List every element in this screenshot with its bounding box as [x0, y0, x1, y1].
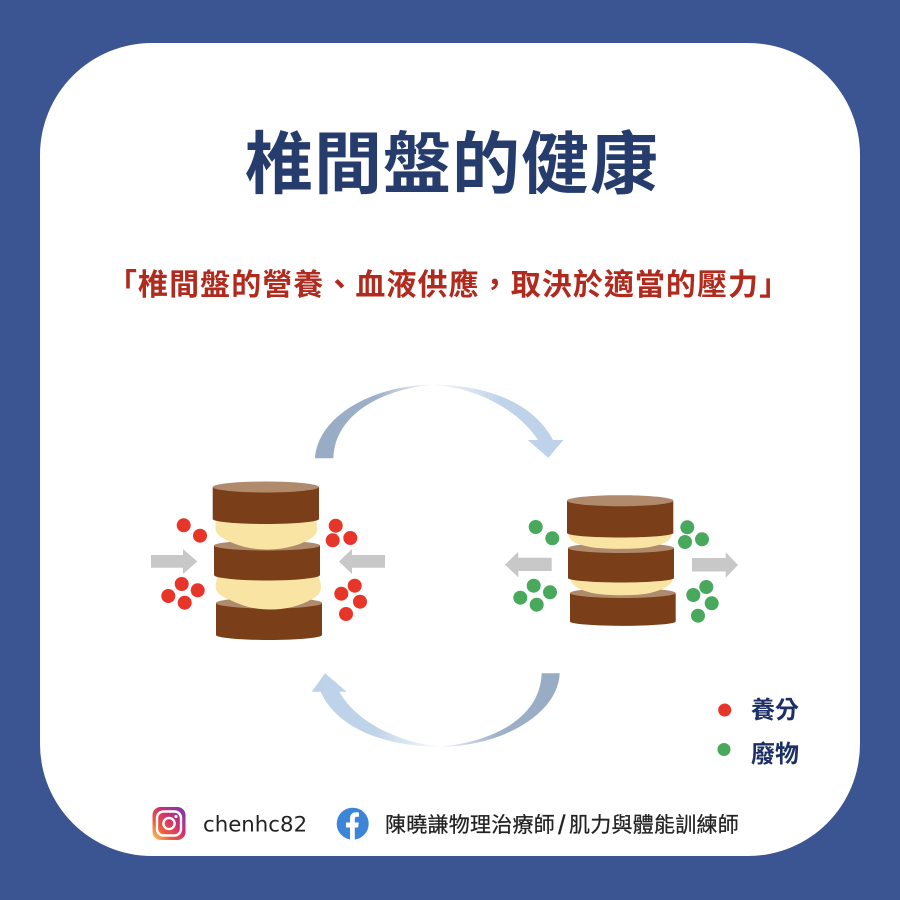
facebook page name: /: [558, 810, 566, 840]
green waste dots, right stack: [513, 520, 719, 623]
left spine stack: compressed state: [213, 482, 322, 640]
instagram handle: chenhc82: [203, 812, 307, 838]
lower disc: [216, 575, 321, 610]
red nutrient dots, left stack: [161, 518, 367, 621]
title: 椎間盤的健康: [245, 127, 659, 203]
icon: instagram: [152, 807, 186, 840]
lower disc: [570, 576, 673, 595]
upper disc: [215, 517, 317, 550]
arrow: gray inward left: [151, 549, 197, 574]
arrow: gray inward right: [339, 549, 385, 574]
upper disc: [568, 531, 672, 549]
arrow: gray outward left: [505, 552, 552, 577]
legend: waste: 廢物: [751, 741, 799, 768]
legend: [718, 697, 799, 768]
bottom vertebra: [570, 588, 676, 626]
facebook page name: 陳曉謙物理治療師: [385, 814, 555, 837]
middle vertebra: [568, 543, 674, 582]
arrow: gray outward right: [692, 552, 738, 578]
middle vertebra: [214, 540, 320, 580]
icon: facebook: [337, 808, 369, 840]
top vertebra: [213, 482, 319, 524]
legend: nutrients: 養分: [751, 697, 799, 724]
top vertebra: [567, 495, 673, 538]
bottom vertebra: [216, 598, 322, 640]
right spine stack: relaxed state: [567, 495, 676, 626]
arrow: bottom curved: [312, 673, 560, 747]
arrow: top curved: [315, 385, 563, 458]
facebook page name: 肌力與體能訓練師: [569, 814, 739, 837]
subtitle: 「椎間盤的營養、血液供應，取決於適當的壓力」: [107, 260, 790, 304]
